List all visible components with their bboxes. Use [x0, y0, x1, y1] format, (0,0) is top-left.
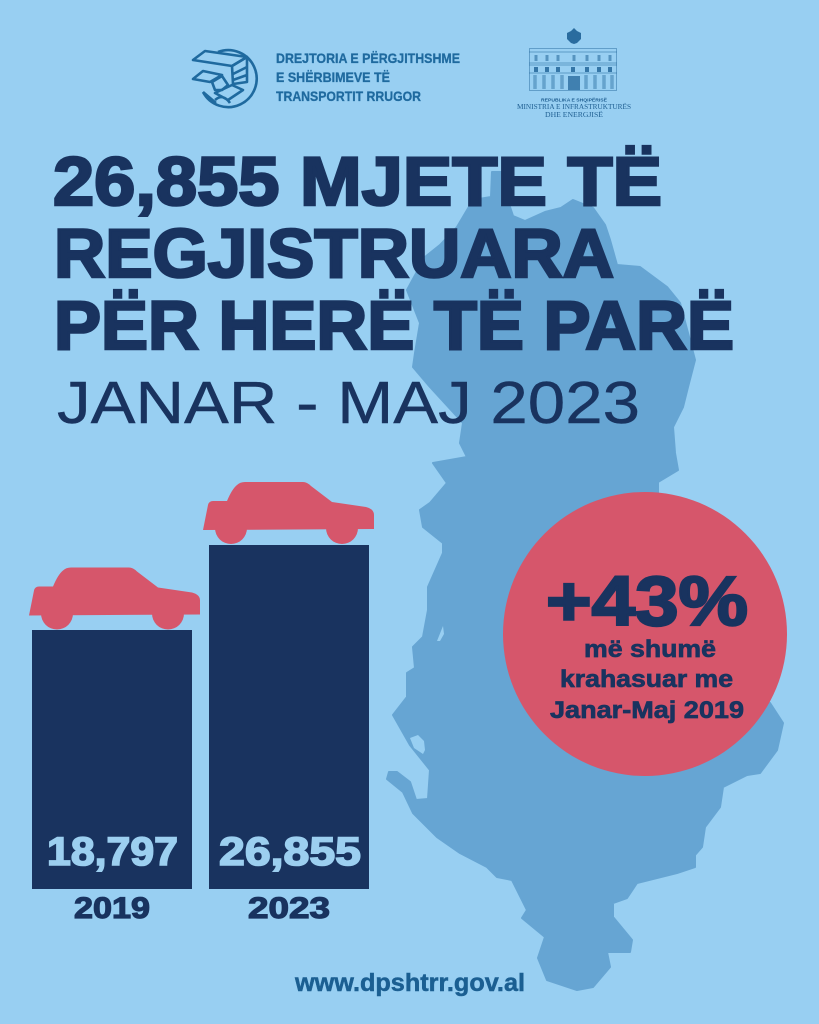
car icon on 2023 bar [203, 482, 374, 544]
value 2023: 26,855 [219, 830, 361, 874]
directorate name: DREJTORIA E PËRGJITHSHME [276, 50, 460, 66]
callout: +43%: krahasuar me [560, 666, 733, 693]
bar chart: 2019 vs 2023 [29, 482, 374, 925]
title: REGJISTRUARA [54, 215, 614, 292]
value 2019: 18,797 [47, 830, 178, 874]
map of Albania [387, 172, 783, 990]
ministry name: DHE ENERGJISË [545, 110, 603, 119]
callout: +43%: më shumë [584, 636, 716, 663]
ministry name: MINISTRIA E INFRASTRUKTURËS [517, 102, 631, 111]
title: PËR HERË TË PARË [54, 287, 734, 364]
callout: +43%: Janar-Maj 2019 [550, 697, 744, 724]
bar 2019 [32, 630, 192, 889]
callout: +43% [503, 492, 787, 776]
directorate name: E SHËRBIMEVE TË [276, 69, 390, 85]
year 2019: 2019 [74, 892, 150, 925]
logo: transport directorate emblem [193, 50, 257, 107]
website: www.dpshtrr.gov.al [294, 969, 525, 997]
title: 26,855 MJETE TË [53, 143, 662, 220]
ministry name [517, 96, 631, 119]
directorate name [276, 50, 460, 104]
bar 2023 [209, 545, 369, 889]
callout: +43%: +43% [546, 562, 748, 640]
year 2023: 2023 [248, 892, 330, 925]
ministry name: REPUBLIKA E SHQIPËRISË [541, 96, 607, 102]
directorate name: TRANSPORTIT RRUGOR [276, 88, 421, 104]
title [53, 143, 734, 364]
logo: ministry building [529, 28, 617, 90]
car icon on 2019 bar [29, 568, 200, 630]
subtitle: period: JANAR - MAJ 2023 [57, 370, 640, 436]
